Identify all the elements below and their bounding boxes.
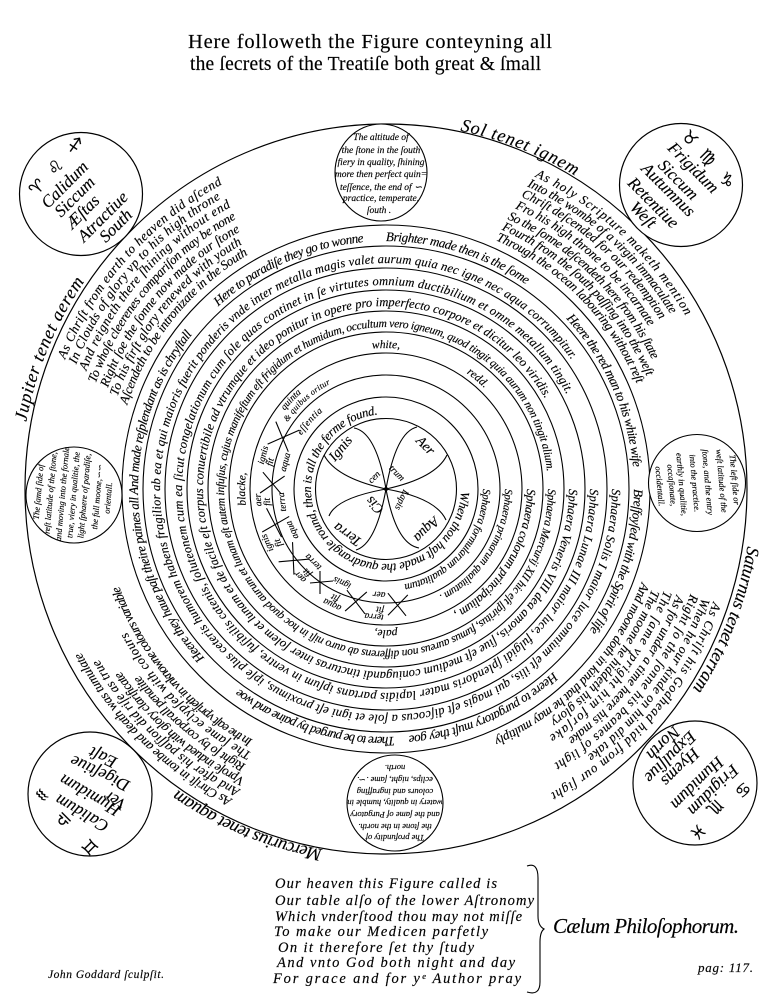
verse: lower right: As for under a time heere his make (568, 594, 683, 744)
verse: upper left (58, 176, 248, 406)
ring 5 text: sphere of Mercury: Sphaera Mercurij XII hic eſt ſpiritus, fumus aureus non differens ab auro niſi in hoc quod aurum et lunam eſt autem infuſus, cujus manifeſtum eſt frigidum et humidum, occultum vero igneum, quod tingit quia aurum non tingit alium. (215, 318, 557, 660)
four element names: Terra (331, 519, 365, 549)
page number: pag: 117. (697, 960, 753, 975)
verse: lower right: As Chriſt his Godhead hidd from our ſight (551, 600, 720, 800)
circle: north profundity (347, 755, 443, 851)
closing verse: On it therefore ſet thy ſtudy (278, 940, 475, 956)
verse: upper left: Right ſoe the ſonne now made our ſtone (100, 226, 240, 388)
ring 3 text: sphere of the moon: Sphaera Lunae III maior luce, fulgidi ſplendoris mater lapidis partans ipſum in ventre, fuſibilis catenis, ſoluteonem cum ea ſicut congelationum cum ſole quas continet in ſe virtutes omnium ductibilium et omne metallum tingit. (173, 277, 598, 702)
corner circle: north: ♏︎ (702, 795, 727, 820)
circle: north profundity: The profundity of (364, 833, 424, 843)
corner circle: south: ♐︎ (66, 135, 84, 157)
verse: upper left: To his firſt glory renewed with youth (110, 238, 242, 396)
verse: lower left: As Chriſt in tombe and death was tumulate (76, 653, 233, 805)
circle: south altitude: The altitude of (353, 132, 410, 143)
circle: west latitude: The left ſide or (728, 454, 742, 506)
corner circle: east: Ver (100, 786, 129, 814)
engraver credit: John Goddard ſculpſit. (48, 969, 164, 981)
verse: lower left: The ſame eclypſed with colours (122, 633, 251, 760)
verse: upper right: Fro his high throne to be incarnate (514, 201, 654, 326)
figure name: Cælum Philoſophorum. (553, 914, 739, 938)
element labels (253, 445, 386, 622)
ring 6 text: sphere of colours: Sphaera colorum principalium , (452, 489, 538, 622)
element labels: fit (272, 537, 285, 549)
element labels: fit (300, 566, 314, 579)
title (188, 31, 552, 75)
verse: upper left: In Clouds of glory vp to his high throne (68, 194, 220, 365)
circle: east latitude: true, viery in qualitie, the (64, 451, 82, 538)
corner circle: west: Weſt (626, 197, 661, 233)
circle: west latitude: into the practice. (688, 454, 703, 512)
circle: south altitude: fiery in quality, ſhining (337, 157, 425, 168)
element labels: terra (277, 492, 289, 512)
outer planet labels (15, 120, 758, 861)
verse: lower left: In the eaſt vpriſeth in vnknowne colours variable (112, 587, 253, 747)
corner circle: west (620, 124, 742, 246)
corner circle: east: Humidum (56, 770, 124, 821)
circle: south altitude: teſſence, the end of ∽ (340, 182, 422, 193)
circle: north profundity: the ſtone in the north. (358, 822, 432, 832)
ring 1 text: Heere the red man to his white wife (566, 314, 642, 466)
circle: east latitude: orientall. (102, 482, 114, 514)
verse: upper right: Through the ocean labouring without reſt (496, 232, 644, 384)
corner circle: south: ♌︎ (43, 155, 68, 180)
element labels: ignis (259, 532, 276, 553)
circle: south altitude: practice, temperate, (342, 194, 419, 204)
element labels: aer (292, 568, 309, 584)
corner circle: north: ♋︎ (730, 777, 755, 802)
closing verse: Which vnderſtood thou may not miſſe (275, 909, 523, 925)
corner circle: north: Hyems (657, 744, 704, 791)
element labels: fit (262, 497, 273, 506)
corner circle: north: Expulſiue (640, 727, 701, 787)
circle: west latitude (648, 434, 746, 532)
corner circle: south: ♈︎ (25, 175, 50, 200)
corner circle: east: Digeſtiue (67, 751, 133, 796)
ring 1 text: Breſfoyſed with the Spirit of life (590, 489, 643, 634)
ring 9 text: quadrangle: When thou haſt made the quadrangle round, then is all the ferme found. (300, 404, 472, 575)
verse: upper right: As holy Scripture maketh mention (534, 170, 690, 316)
corner circle: west: Autumnus (637, 158, 699, 221)
closing verse: To make our Medicen parfetly (274, 924, 489, 940)
element labels: aer (372, 588, 386, 600)
closing verse: And vnto God both night and day (276, 955, 516, 971)
circle: west latitude: ſtone, and the entry (700, 449, 716, 516)
corner circle: east (28, 732, 152, 859)
circle: north profundity: north. (385, 763, 405, 773)
outer circle (25, 124, 747, 854)
corner circle: south: Atractiue (73, 187, 132, 246)
corner circle: east: ♒︎ (30, 782, 55, 807)
corner circle: west: Retentiue (623, 173, 683, 232)
ring 1 text (129, 232, 643, 746)
verse: lower right: And moone doth in kind that he may multiply (496, 581, 648, 744)
corner circle: east: Calidum (52, 791, 112, 836)
circle: west latitude: occidentall. (653, 466, 667, 507)
four element names: Ignis (326, 433, 356, 465)
verse: lower right (496, 581, 720, 800)
element labels: ignis (332, 574, 353, 591)
element labels: aqua (321, 595, 343, 613)
corner circle: east: Eaſt (85, 742, 121, 772)
verse: lower right: The ſame vpright him forſake (550, 591, 672, 741)
circle: east latitude: The ſamd ſide of (31, 462, 46, 520)
corner circle: east: ♎︎ (51, 807, 76, 832)
outer planet labels: Jupiter tenet aerem (15, 278, 84, 422)
ring 1 text: Heere to purgatory muſt they goe (409, 672, 558, 742)
circle: east latitude: light ſphaere of paradiſe, (75, 453, 93, 539)
centre point (384, 487, 388, 491)
verse: lower left: Right ſo by corporall penalite (135, 676, 246, 772)
title: Here followeth the Figure conteyning all (188, 31, 552, 53)
verse: lower right: When he our kinde on him did take (588, 600, 710, 760)
circle: south altitude: ſouth . (367, 205, 391, 216)
element labels: aer (253, 493, 265, 507)
verse: lower left: Vproſe indued with glory clarificate (116, 672, 242, 786)
four element names: Cis (363, 492, 387, 517)
circle: east latitude: and moving into the fornale (53, 446, 71, 541)
element labels: fit (329, 591, 341, 604)
four element names: Aer (412, 433, 438, 459)
verse: lower left: And after his paſſion did riſe as true (94, 660, 241, 796)
corner circle: west: Frigidum (663, 138, 723, 197)
four element names: Aqua (410, 512, 442, 545)
closing verse: For grace and for yᵉ Author pray (272, 971, 522, 987)
verse: upper left: And reigneth there ſhining without end (80, 198, 230, 372)
circle: east latitude (26, 444, 122, 545)
element labels: fit (375, 604, 384, 615)
corner circle: north: North (643, 722, 685, 764)
ring 8 text: qualities: Sphaera formularum qualitatum (403, 489, 492, 593)
circle: north profundity: and the ſame of Purgatory (350, 810, 440, 820)
element labels: terra (303, 551, 324, 572)
verse: lower right: Right ſo the ſonne his beames of light (554, 594, 698, 770)
verse: upper right (496, 170, 690, 384)
outer planet labels: Saturnus tenet terram (693, 546, 758, 692)
circle: east latitude: the full moone,∽∽ (89, 464, 105, 530)
circle: south altitude: more then perfect quin= (335, 169, 427, 180)
element labels: terra (364, 610, 384, 622)
ring 2 text: sphere of the sun: Sphaera Solis I maior luce omnium eſt ilis, qui magis eſt diſcocus a ſole et igni eſt proximus, ipſe plus ceteris humorem habens fragilior ab ea et qui maioris fuerit ponderis vnde inter metalla magis valet aurum quia nec igne nec aqua corrumpitur. (151, 255, 620, 724)
concentric sphere diagram (15, 120, 758, 861)
circle: west latitude: earthly in qualitie, (674, 452, 690, 516)
ring 1 text: Here to paradiſe they go to wonne (213, 236, 363, 307)
element crosses (260, 422, 408, 617)
corner circle: north: ♓︎ (685, 819, 710, 844)
corner circle: south: South (95, 205, 136, 246)
corner circle: west: ♑︎ (714, 168, 739, 193)
verse: upper left: Aſcendeth to be intronizate in the South (120, 248, 248, 406)
outer planet labels: Sol tenet ignem (460, 120, 578, 176)
brace (527, 865, 544, 993)
ring 6 text: sphere of colours: redd. (465, 366, 491, 390)
corner circle: west: ♍︎ (695, 145, 720, 170)
verse: upper right: Fourth from the ſouth paſſing into the weſt (501, 222, 654, 376)
quinta essentia labels: quinta (279, 388, 304, 412)
element labels: aqua (279, 452, 293, 473)
four element names: Lapis (392, 487, 411, 512)
quinta essentia labels: & quibus oritur (281, 376, 332, 423)
circle: south altitude: the ſtone in the ſouth (342, 145, 421, 156)
ring 4 text: sphere of Venus: Sphaera Veneris VIII dea amoris, ſiue eſt medium coniugandi tincturas inter ſolem et lunam et de facile eſt corpus conuertibile ad vtrumque et ideo ponitur in opere pro imperfecto corpore et dicitur leo viridis. (192, 295, 580, 683)
circle: west latitude: weſt latitude of the (714, 449, 730, 513)
outer planet labels: Mercurius tenet aquam (174, 790, 323, 861)
corner circle: south: Calidum (37, 157, 92, 212)
corner circle: east: ♊︎ (78, 834, 103, 859)
four element names (326, 433, 442, 549)
ring 7 text: primary qualities: Sphaera primarum qualitatum . (438, 489, 514, 604)
corner circle: south: Æſtas (60, 191, 104, 234)
corner circle: west: Siccum (654, 156, 702, 204)
ring 1 text: Heere they haue paſt theire paines all And made reſplendant as is chryſtall (129, 328, 205, 663)
verse: upper right: So the ſonne deſcendeth here from his ſtate (508, 212, 658, 359)
ring 6 text: sphere of colours: blacke, (236, 472, 249, 506)
four element names: cen (367, 469, 383, 486)
ring 6 text: sphere of colours: white, (372, 339, 401, 352)
closing verse (272, 876, 535, 987)
verse: lower right: The moone he hiddeth his glory (552, 590, 660, 726)
verse: upper right: Chriſt deſcended for our redemption (522, 190, 664, 320)
title: the ſecrets of the Treatiſe both great & ſmall (190, 54, 542, 75)
corner circle: south (20, 132, 142, 256)
ring 6 text: sphere of colours: pale, (374, 627, 399, 639)
circle: north profundity: eclips, night, ſame .∽. (357, 775, 433, 785)
inner circle petals (324, 427, 447, 550)
ring 1 text: Brighter made then is the ſome (386, 232, 529, 284)
circle: west latitude: occaſionate, (665, 464, 679, 506)
quinta essentia labels: eſſentia (296, 406, 325, 437)
ring 1 text: There to be purged by paine and woe (236, 690, 394, 746)
four element names: trum (386, 464, 406, 484)
verse: upper left: As Chriſt from earth to heaven did aſcend (58, 176, 222, 360)
verse: lower left (76, 587, 253, 805)
verse: upper right: Into the wombe of a virgin immaculate (526, 179, 676, 314)
circle: north profundity: colours and ingraffing (357, 787, 433, 797)
element labels: fit (264, 457, 277, 467)
closing verse: Our heaven this Figure called is (275, 876, 497, 892)
closing verse: Our table alſo of the lower Aſtronomy (275, 893, 535, 909)
circle: east latitude: reſt latitude of the ſtone, (42, 452, 59, 534)
corner circle: north: Humidum (667, 752, 728, 814)
corner circle: south: Siccum (51, 173, 99, 221)
element labels: aqua (284, 519, 301, 540)
ring 6 text: sphere of colours (237, 340, 536, 638)
corner circle: north (633, 721, 757, 845)
corner circle: north: Frigidum (684, 760, 743, 820)
circle: south altitude (335, 124, 427, 221)
element labels: ignis (257, 445, 271, 465)
ring lines (122, 225, 650, 753)
verse: upper left: To whoſe cleerenes compariſon may be none (88, 214, 236, 382)
corner circle: west: ♉︎ (677, 126, 702, 151)
circle: north profundity: watery in quality, humble in (347, 798, 443, 808)
quinta essentia labels (282, 380, 329, 435)
